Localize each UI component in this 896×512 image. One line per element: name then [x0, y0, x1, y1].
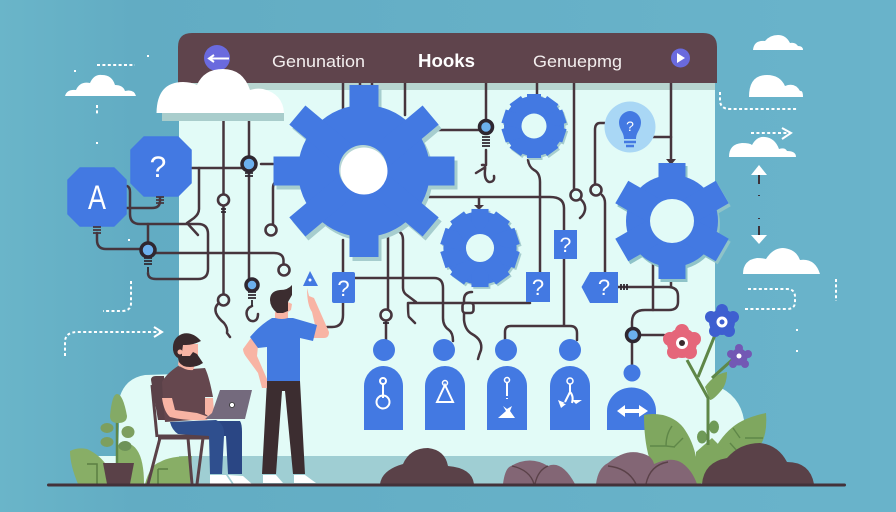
header label: Hooks: Hooks: [418, 51, 475, 71]
head: [286, 302, 292, 313]
badge: question: [131, 137, 191, 196]
gear: right: [615, 163, 731, 282]
mound: purple right: [596, 452, 697, 484]
header label: Genuepmg: Genuepmg: [533, 52, 622, 71]
card: triangle: [425, 366, 465, 430]
trousers: [262, 381, 305, 474]
badge: A: A: [88, 179, 106, 217]
flower: blue: [705, 304, 739, 337]
back arm: [243, 338, 267, 388]
neck: [275, 312, 288, 319]
cloud: top right 1: [753, 35, 803, 50]
cloud: top left: [65, 75, 136, 96]
flower: purple: [727, 344, 752, 368]
card: question 4: ?: [598, 275, 610, 300]
badge: question: ?: [150, 151, 166, 184]
header label: Genunation: Genunation: [272, 52, 365, 71]
shoes: [263, 475, 316, 483]
shoes: [210, 475, 252, 484]
panel: main board: [179, 83, 715, 485]
stem: [687, 335, 732, 445]
potted plant: [100, 394, 134, 484]
gear: large: [274, 85, 458, 261]
card: exclamation: [487, 366, 527, 430]
icon: play button: [671, 48, 690, 68]
large leaf right: [717, 413, 766, 470]
white blob behind plant: [715, 385, 744, 450]
coil under question: [156, 197, 164, 203]
card: question 2: ?: [337, 276, 350, 301]
dashed decorations: [65, 56, 836, 356]
torso: [162, 366, 213, 422]
card: question 3: ?: [532, 275, 544, 300]
neck and face: [178, 344, 198, 370]
flower plant: [644, 304, 766, 484]
laptop: [205, 390, 252, 419]
large leaf left: [644, 414, 700, 484]
coils on wires: [144, 137, 627, 323]
card: question 1: [554, 230, 577, 259]
cloud: middle right: [729, 137, 796, 157]
flower: pink: [663, 324, 701, 359]
small leaf: [705, 372, 727, 400]
arm: [162, 398, 209, 420]
beard: [178, 352, 203, 367]
lightbulb circle: ?: [626, 118, 634, 134]
back leg: [210, 421, 242, 474]
badge: A: [68, 168, 126, 226]
small question cards: [303, 230, 618, 303]
card: question 2: [332, 272, 355, 303]
cloud: top right 2: [749, 75, 803, 97]
lightbulb circle: [604, 102, 656, 152]
connector nodes: [141, 120, 640, 342]
front leg: [170, 420, 224, 474]
hanging circles: [373, 339, 640, 382]
card: branch: [550, 366, 590, 430]
mound: dark centre: [380, 448, 474, 484]
shadow under top cloud: [162, 113, 284, 121]
chair: [148, 385, 210, 484]
card: double arrow: [607, 388, 656, 430]
arrow: up and down: [751, 165, 767, 244]
connector wires: [97, 83, 678, 366]
card: question 3: [526, 272, 550, 302]
shirt: [250, 318, 317, 381]
cloud: lower right: [743, 248, 820, 274]
ear: [178, 350, 182, 354]
raised arm: [307, 288, 329, 338]
coil under A: [93, 227, 101, 233]
triangle marker: [303, 271, 318, 286]
buds: [697, 430, 707, 444]
bushes left plants: [70, 443, 192, 484]
mound: dark right: [702, 443, 814, 484]
ground line: [48, 484, 844, 486]
icon: back button: [204, 45, 230, 71]
card: circle pin: [364, 366, 403, 430]
white blob behind seated person: [93, 374, 179, 485]
leaf veins: [650, 426, 763, 452]
chair back: [151, 376, 166, 420]
card: question 4: [582, 272, 618, 303]
mound: purple centre: [503, 460, 575, 484]
header bar: [178, 33, 717, 83]
tombstone cards: [364, 366, 656, 430]
arrow: dashed right head lower: [154, 327, 162, 337]
cloud: over panel: [156, 69, 284, 113]
person: seated with laptop: [148, 333, 252, 484]
hair: [173, 333, 201, 358]
wire arrowheads: [474, 159, 676, 210]
card: question 1: ?: [560, 234, 571, 257]
base leaf: [696, 438, 748, 484]
gear: small top: [501, 94, 568, 160]
gear: middle: [440, 209, 522, 289]
person: standing pointing: [243, 285, 329, 483]
arrow: dashed right head top: [782, 128, 791, 139]
